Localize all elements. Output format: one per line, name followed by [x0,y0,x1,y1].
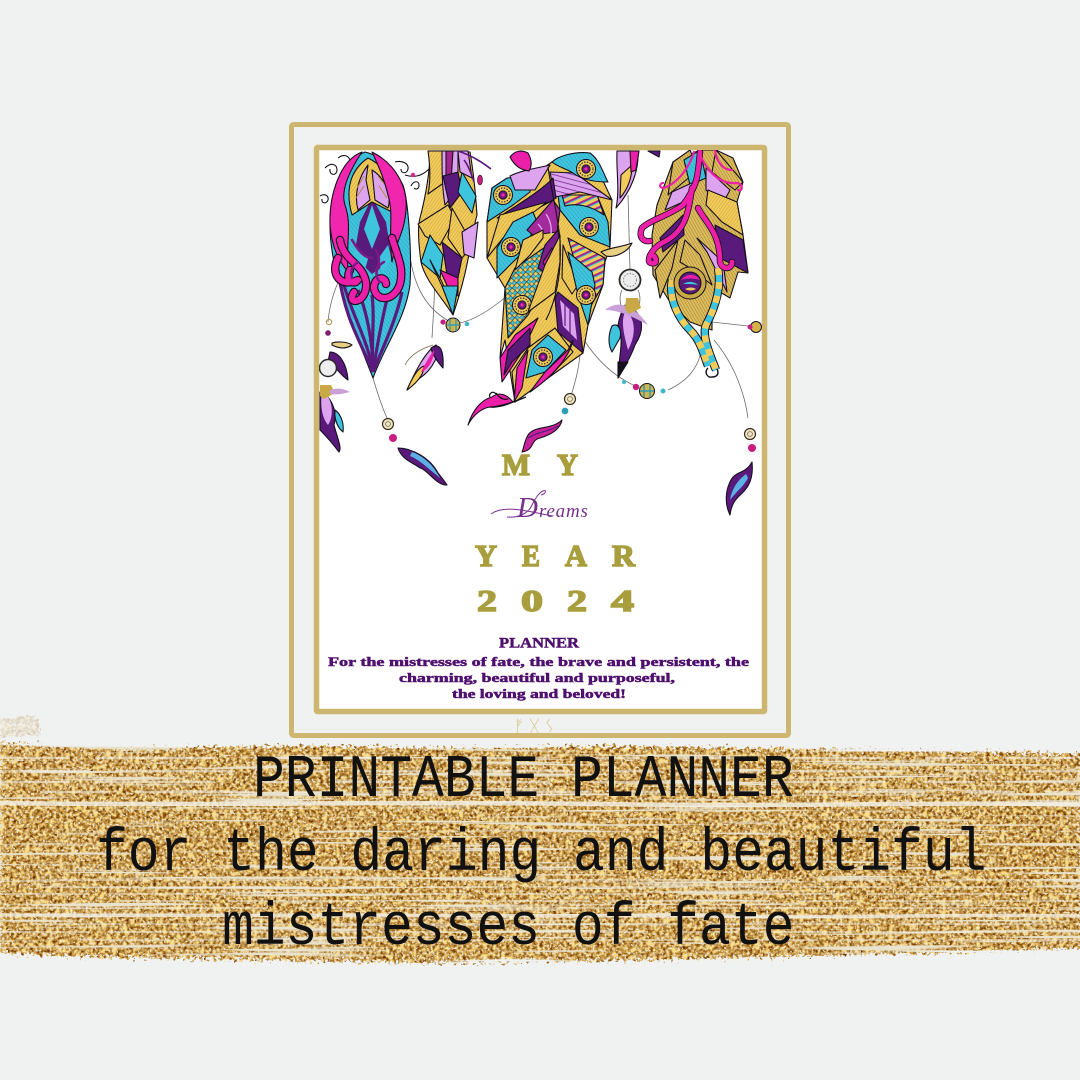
peacock tail strands [671,268,719,370]
icon: feather 3, large centre plume [468,151,612,425]
text: planner description: the loving and beloved! [452,687,626,701]
text: planner description: charming, beautiful and purposeful, [399,671,675,685]
text: PLANNER subtitle: PLANNER [499,636,579,652]
icon: feather 5, gold and pink with peacock eye [641,150,748,377]
text: Dreams script: Dreams [516,492,589,524]
headline: printable planner caption: mistresses of fate [222,895,794,963]
text: planner description [328,655,750,701]
text: MY [502,447,578,482]
text: YEAR: E [522,538,540,573]
text: 2024: 2 [477,583,497,618]
strings and beads [325,195,762,452]
panel: planner cover page [316,148,764,712]
icon: feather 2, layered plumes [418,151,491,315]
icon: small feather below feather 2 [405,345,443,390]
panel: outer gold frame [292,124,788,736]
icon: small feather 4 with dreamcatcher [601,151,660,378]
headline: printable planner caption: for the daring and beautiful [96,821,987,889]
icon: feather 1, pink and teal [330,152,411,378]
headline: printable planner caption [96,747,987,963]
icon: tail feather under bead 1 [398,448,447,485]
text: YEAR [475,538,636,573]
text: 2024: 0 [521,583,543,618]
text: YEAR: A [565,538,588,573]
banner: gold glitter brush stroke [0,716,1080,963]
text: 2024: 2 [567,583,587,618]
icon: left dreamcatcher [320,342,352,452]
illustration: hanging boho feathers [320,150,762,515]
text: YEAR: R [612,538,636,573]
text: MY: Y [557,447,578,482]
icon: tail feather far right [726,462,752,515]
text: MY: M [502,447,530,482]
pale streaks in the brush stroke [0,758,1080,940]
icon: black curl ornaments top left [320,156,429,203]
text: rune signature: ᚠᚷᛊ [514,717,560,737]
text: 2024: 4 [611,583,634,618]
icon: tail feather under bead 2 [522,420,562,452]
text: 2024 [477,583,634,618]
text: planner description: For the mistresses of fate, the brave and persistent, the [328,655,750,669]
text: YEAR: Y [475,538,497,573]
silhouette [487,153,612,402]
headline: printable planner caption: PRINTABLE PLANNER [253,747,794,815]
